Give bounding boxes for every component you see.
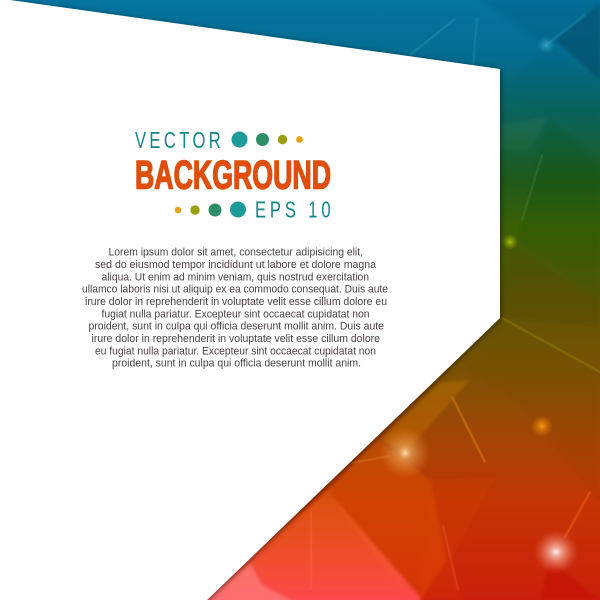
- body text: irure dolor in reprehenderit in voluptate velit esse cillum dolore: [92, 333, 380, 345]
- eps label: EPS 10: [255, 198, 331, 223]
- polygon facets: [200, 0, 600, 600]
- body text: eu fugiat nulla pariatur. Excepteur sint occaecat cupidatat non: [95, 345, 376, 357]
- glow: lime star: [502, 234, 518, 250]
- heading: vector row: [135, 128, 303, 154]
- body text: proident, sunt in culpa qui officia deserunt mollit anim. Duis aute: [88, 321, 384, 333]
- body text: Lorem ipsum dolor sit amet, consectetur adipisicing elit,: [108, 246, 363, 258]
- heading: background: BACKGROUND: [135, 154, 331, 198]
- bottom dots: [175, 202, 246, 218]
- top dots: [232, 132, 303, 148]
- body text: [82, 246, 388, 370]
- glow: peach star: [379, 427, 431, 479]
- body text: irure dolor in reprehenderit in voluptate velit esse cillum dolore eu: [85, 296, 387, 308]
- vector label: VECTOR: [135, 128, 221, 154]
- light rays: [311, 15, 600, 590]
- glow: blue star: [537, 36, 555, 54]
- glow: white star: [534, 530, 578, 574]
- body text: sed do eiusmod tempor incididunt ut labore et dolore magna: [95, 259, 376, 271]
- glow: orange star: [531, 415, 553, 437]
- body text: ullamco laboris nisi ut aliquip ex ea commodo consequat. Duis aute: [82, 284, 388, 296]
- body text: fugiat nulla pariatur. Excepteur sint occaecat cupidatat non: [102, 308, 370, 320]
- heading: eps row: [175, 198, 331, 223]
- body text: proident, sunt in culpa qui officia deserunt mollit anim.: [112, 358, 361, 370]
- body text: aliqua. Ut enim ad minim veniam, quis nostrud exercitation: [102, 271, 369, 283]
